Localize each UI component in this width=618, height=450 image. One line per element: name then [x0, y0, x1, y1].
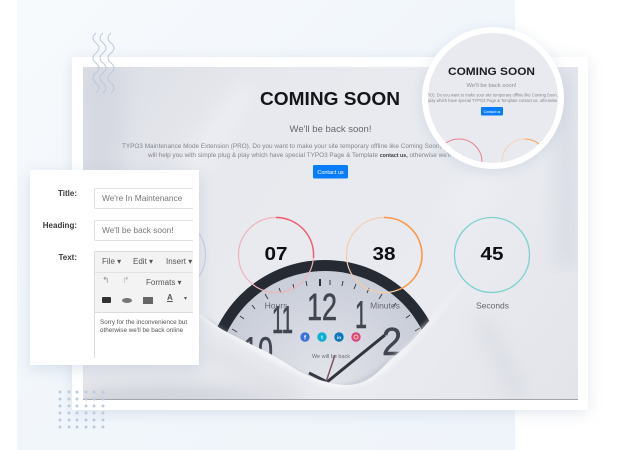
editor text: Sorry for the inconvenience but [100, 319, 187, 326]
editor menu bar: File ▾ [102, 257, 121, 266]
editor menu bar: Edit ▾ [133, 257, 153, 266]
subheading: We'll be back soon! [290, 124, 371, 135]
editor toolbar: Formats ▾ [146, 278, 182, 287]
wave decoration [93, 33, 114, 93]
magnifier rings [446, 138, 482, 162]
countdown: hours: Hours [265, 300, 287, 310]
editor toolbar [95, 273, 193, 313]
countdown: minutes: 38 [372, 243, 396, 264]
magnifier circle [421, 27, 564, 185]
social icons: in [337, 335, 341, 340]
text label: Text: [58, 253, 77, 262]
heading label: Heading: [43, 221, 77, 230]
countdown: seconds: 45 [480, 243, 504, 264]
fabric page background [83, 67, 578, 400]
editor menu bar [95, 252, 193, 273]
clock numerals: 11 [272, 299, 293, 342]
clock numerals: 10 [243, 330, 273, 373]
contact button [313, 165, 348, 178]
form panel [30, 170, 199, 365]
social icons: f [304, 336, 307, 342]
social icons [300, 332, 361, 342]
clock numerals [245, 293, 400, 356]
main illustration [58, 27, 592, 428]
magnifier circle: Contact us [484, 110, 501, 114]
countdown: minutes [346, 217, 422, 310]
social icons: t [321, 335, 323, 341]
clock [206, 260, 430, 385]
footer note: We will be back [312, 354, 350, 360]
fabric fold over clock [83, 315, 445, 399]
clock numerals: 12 [307, 287, 337, 329]
heading input [94, 220, 193, 241]
countdown: hours: 07 [264, 243, 288, 264]
editor menu bar: Insert ▾ [166, 257, 192, 266]
magnifier heading: COMING SOON [448, 66, 535, 78]
description: will help you with simple plug & play which have special TYPO3 Page & Template contact us, otherwise we'll be back [147, 152, 476, 159]
editor toolbar: ▾ [184, 296, 187, 302]
countdown: days (partial) [130, 218, 206, 292]
magnifier description [428, 93, 558, 103]
white screenshot card [72, 57, 588, 410]
heading: COMING SOON [260, 89, 400, 109]
rich text editor [94, 251, 193, 358]
editor text: otherwise we'll be back online [100, 327, 183, 334]
countdown: seconds [454, 218, 530, 310]
magnifier button [481, 107, 503, 116]
countdown: seconds: Seconds [476, 300, 509, 310]
magnifier description: g & play which have special TYPO3 Page & Template contact us, otherwise w [421, 98, 561, 103]
description [122, 143, 476, 159]
magnifier subheading: We'll be back soon! [467, 83, 517, 89]
dot grid [58, 390, 104, 428]
title label: Title: [58, 189, 77, 198]
editor toolbar: ↰ [102, 275, 110, 285]
editor text [100, 319, 188, 334]
contact button: Contact us [317, 170, 344, 176]
title input: We're In Maintenance [102, 193, 182, 203]
editor toolbar: ↱ [122, 275, 130, 285]
countdown: minutes: Minutes [370, 300, 400, 310]
title input [94, 188, 193, 209]
clock numerals: 1 [355, 294, 367, 337]
magnifier description: PRO). Do you want to make your site temporary offline like Coming Soon, [424, 92, 558, 98]
editor toolbar: A [167, 293, 173, 302]
description: TYPO3 Maintenance Mode Extension (PRO). Do you want to make your site temporary offline like Coming Soon, [122, 143, 441, 150]
clock numerals: 2 [382, 321, 402, 364]
countdown: hours [238, 217, 314, 310]
heading input: We'll be back soon! [102, 225, 174, 235]
